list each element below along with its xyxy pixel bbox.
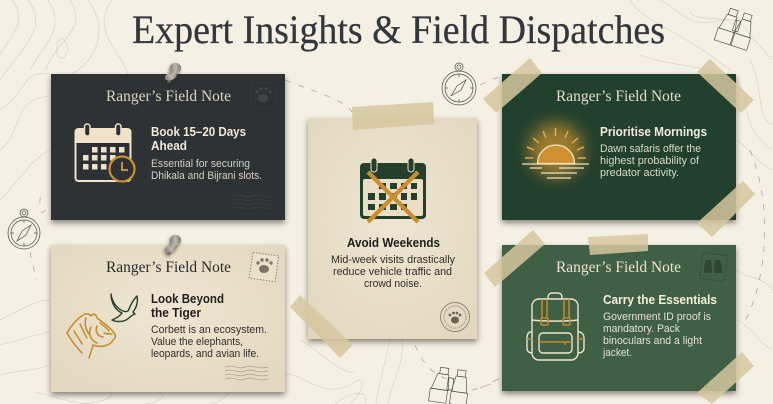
postmark waves	[233, 195, 273, 209]
text: highest probability of	[600, 155, 700, 167]
text: Government ID proof is	[603, 311, 711, 323]
panel: prioritise mornings	[483, 58, 755, 237]
icon: compass top	[442, 63, 476, 105]
heading: Ranger’s Field Note	[106, 259, 231, 276]
tape: top	[588, 234, 648, 255]
text: the Tiger	[151, 305, 201, 320]
icon: crossed calendar	[360, 158, 426, 222]
tape: top left	[484, 230, 545, 287]
text: Avoid Weekends	[347, 235, 440, 250]
icon: binoculars top right	[714, 7, 757, 50]
panel: look beyond the tiger	[51, 235, 285, 392]
text: binoculars and a light	[603, 335, 702, 347]
icon: compass left	[8, 209, 40, 249]
title: Expert Insights & Field Dispatches	[132, 7, 665, 52]
text	[151, 291, 267, 360]
text: Dawn safaris offer the	[600, 143, 701, 155]
text: Value the elephants,	[151, 336, 243, 348]
dashed trail	[30, 76, 765, 390]
tape: top	[352, 102, 434, 130]
tape: bottom right	[697, 181, 755, 237]
text: Dhikala and Bijrani slots.	[151, 170, 262, 182]
text: jacket.	[602, 347, 632, 359]
text	[600, 124, 707, 179]
tape: top right	[697, 59, 754, 113]
text: Essential for securing	[151, 158, 250, 170]
stamp: paw	[250, 82, 277, 109]
round stamp	[440, 302, 470, 332]
tape: bottom left	[290, 295, 353, 358]
text: Prioritise Mornings	[600, 124, 707, 139]
text: Look Beyond	[151, 291, 224, 306]
text: leopards, and avian life.	[151, 348, 259, 360]
postmark waves	[225, 366, 268, 380]
text: crowd noise.	[364, 278, 422, 290]
icon: tiger	[67, 314, 115, 358]
text: reduce vehicle traffic and	[333, 266, 452, 278]
icon: calendar with clock	[76, 124, 134, 182]
text: Book 15–20 Days	[151, 124, 246, 139]
text	[331, 235, 455, 290]
stamp: paw	[249, 252, 279, 282]
icon: bird	[111, 294, 137, 322]
heading: Ranger’s Field Note	[556, 88, 681, 105]
push pin	[164, 63, 181, 83]
heading: Ranger’s Field Note	[106, 88, 231, 105]
text: mandatory. Pack	[603, 323, 680, 335]
text: predator activity.	[600, 167, 679, 179]
text: Ahead	[151, 138, 187, 153]
stamp: binoculars	[700, 253, 727, 281]
push pin	[164, 235, 181, 255]
panel: carry the essentials	[484, 230, 754, 404]
panel: avoid weekends	[290, 102, 477, 358]
panel: book ahead	[51, 63, 285, 220]
text: Corbett is an ecosystem.	[151, 324, 267, 336]
heading: Ranger’s Field Note	[556, 259, 681, 276]
icon: sunrise	[522, 123, 589, 178]
tape: bottom right	[697, 352, 754, 404]
tape: top left	[483, 58, 542, 113]
text: Mid-week visits drastically	[331, 254, 455, 266]
icon: binoculars bottom	[428, 366, 471, 404]
text: Carry the Essentials	[603, 292, 717, 307]
text	[151, 124, 262, 182]
icon: backpack	[527, 293, 584, 360]
text	[602, 292, 717, 359]
